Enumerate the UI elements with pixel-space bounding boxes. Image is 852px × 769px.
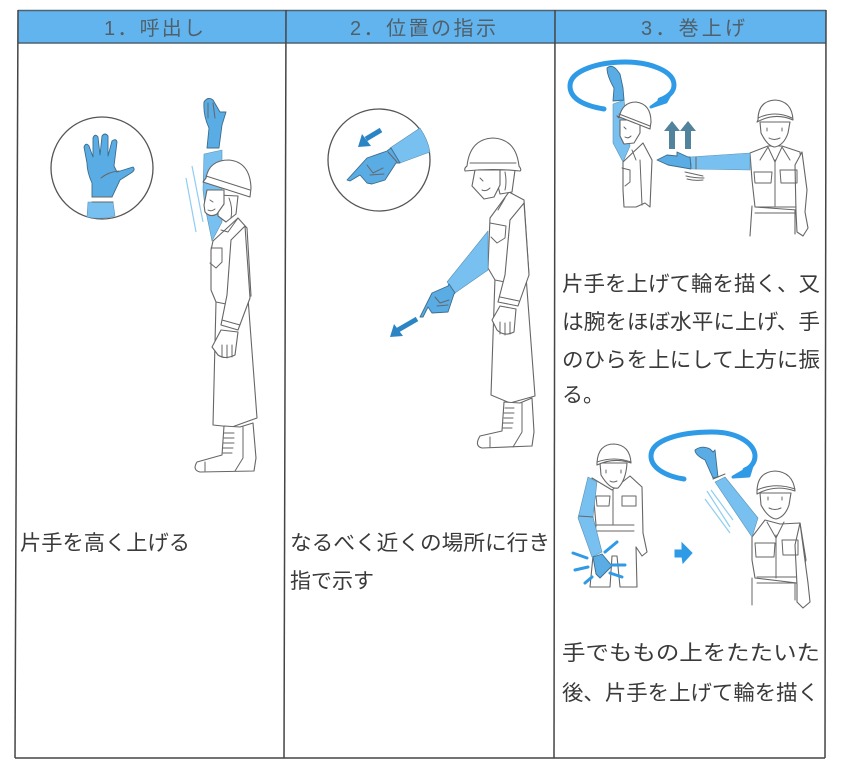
table header band xyxy=(18,10,826,43)
heading: step 2: 2．位置の指示 xyxy=(350,17,496,40)
figure: worker arm horizontal front view xyxy=(657,100,808,236)
trousers xyxy=(491,276,535,403)
sleeve and cuff xyxy=(498,203,529,306)
raised sleeve xyxy=(715,477,758,537)
head xyxy=(760,122,790,147)
torso xyxy=(488,192,529,282)
text: step 3 instruction B xyxy=(562,642,820,705)
icon: rotation ring with arrow top xyxy=(570,62,674,109)
text: step 2 instruction xyxy=(290,532,550,593)
face xyxy=(472,170,500,199)
text: step 3 instruction A: る。 xyxy=(562,384,604,407)
text: step 3 instruction A: のひらを上にして上方に振 xyxy=(562,349,820,372)
hand xyxy=(492,306,516,334)
trousers xyxy=(213,298,257,427)
impact marks xyxy=(573,542,625,583)
icon: open hand in circle xyxy=(51,117,153,219)
figure: worker pointing downward xyxy=(390,138,535,448)
torso xyxy=(752,520,806,583)
glove xyxy=(695,447,718,478)
pointing arm and glove xyxy=(447,231,488,293)
text: step 3 instruction A xyxy=(562,273,820,407)
icon: right arrow xyxy=(675,543,692,563)
arrow xyxy=(358,130,381,147)
text: step 3 instruction A: は腕をほぼ水平に上げ、手 xyxy=(562,311,820,334)
text: step 2 instruction: 指で示す xyxy=(290,570,374,593)
sleeve and cuff xyxy=(221,226,250,330)
motion lines xyxy=(705,490,733,533)
raised sleeve and glove xyxy=(690,153,750,170)
arm down xyxy=(795,152,808,236)
text: step 3 instruction A: 片手を上げて輪を描く、又 xyxy=(562,273,820,296)
icon: rotation ring with arrow bottom xyxy=(651,432,755,479)
heading: step 1: 1．呼出し xyxy=(104,17,204,40)
pocket and collar xyxy=(490,198,506,243)
text: step 3 instruction B: 手でももの上をたたいた xyxy=(562,642,820,665)
motion lines xyxy=(186,166,203,232)
figure: worker raising arm side view xyxy=(607,66,652,207)
hair xyxy=(494,170,515,194)
pants and torso xyxy=(750,206,795,236)
raised arm and glove xyxy=(203,150,222,241)
heading: step 3: 3．巻上げ xyxy=(641,17,745,40)
boots xyxy=(477,398,534,448)
text: step 1 instruction: 片手を高く上げる xyxy=(20,532,190,555)
boots xyxy=(195,423,256,472)
figure: worker raising arm after tapping xyxy=(695,447,810,608)
text: step 2 instruction: なるべく近くの場所に行き xyxy=(290,532,550,555)
helmet xyxy=(203,160,251,197)
helmet xyxy=(465,138,521,171)
figure: worker tapping thigh xyxy=(573,444,647,587)
text: step 3 instruction B: 後、片手を上げて輪を描く xyxy=(562,682,819,705)
figure: worker raising one hand xyxy=(186,98,257,472)
hair xyxy=(218,195,238,222)
torso xyxy=(211,218,251,304)
pocket and collar xyxy=(210,218,238,268)
head xyxy=(760,493,791,519)
icon: pointing hand in circle xyxy=(328,109,430,211)
face xyxy=(204,190,224,216)
icon: two upward arrows xyxy=(664,121,696,149)
hand xyxy=(212,330,238,358)
arrow xyxy=(390,319,417,337)
